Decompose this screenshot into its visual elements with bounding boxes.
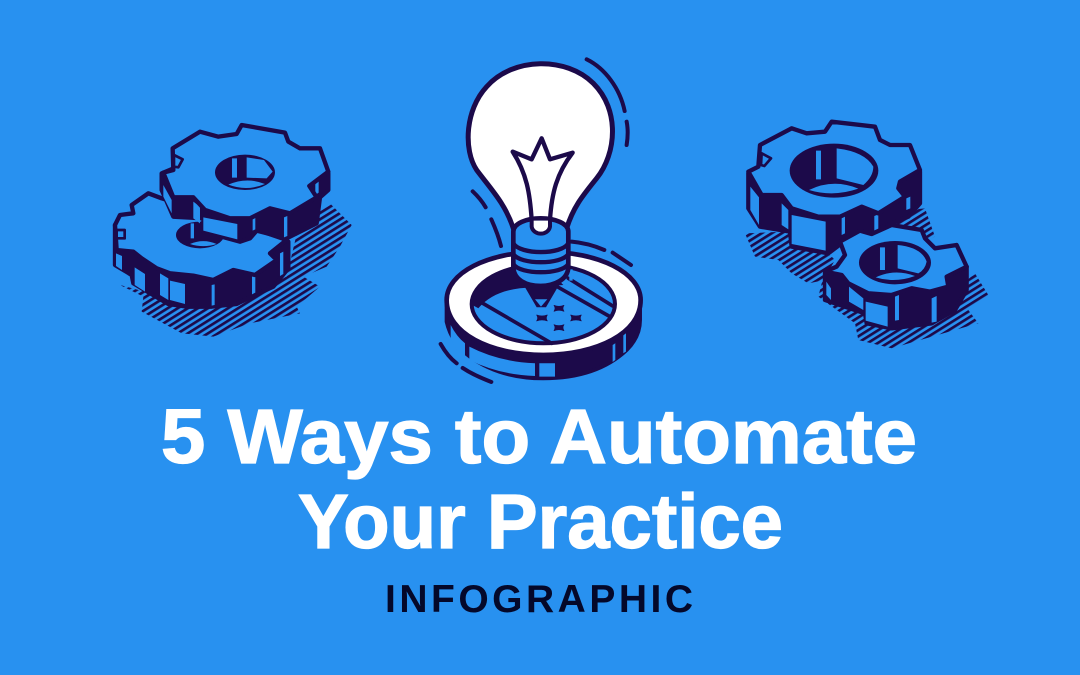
title: 5 Ways to Automate <box>161 394 917 480</box>
upper gear <box>162 125 328 242</box>
upper gear hole <box>215 155 275 190</box>
illustration: light bulb on ring <box>441 59 641 382</box>
sparkles on ring floor <box>537 305 581 331</box>
lower gear hole <box>176 222 224 248</box>
motion lines <box>441 59 631 382</box>
lower gear <box>115 193 288 307</box>
ring <box>447 252 641 378</box>
large gear <box>748 122 920 253</box>
small gear hole <box>859 241 931 284</box>
small gear <box>825 225 967 328</box>
gear shadow hatching <box>745 208 988 348</box>
illustration: two gears, right <box>745 122 988 348</box>
large gear hole <box>790 144 878 198</box>
bulb glass <box>468 64 612 228</box>
bulb screw base <box>513 218 568 307</box>
title <box>161 394 917 565</box>
gear shadow hatching <box>120 203 352 337</box>
subtitle: INFOGRAPHIC <box>385 578 693 621</box>
filament <box>513 138 573 220</box>
illustration: stacked gears, left <box>115 125 352 337</box>
title: Your Practice <box>298 479 783 565</box>
